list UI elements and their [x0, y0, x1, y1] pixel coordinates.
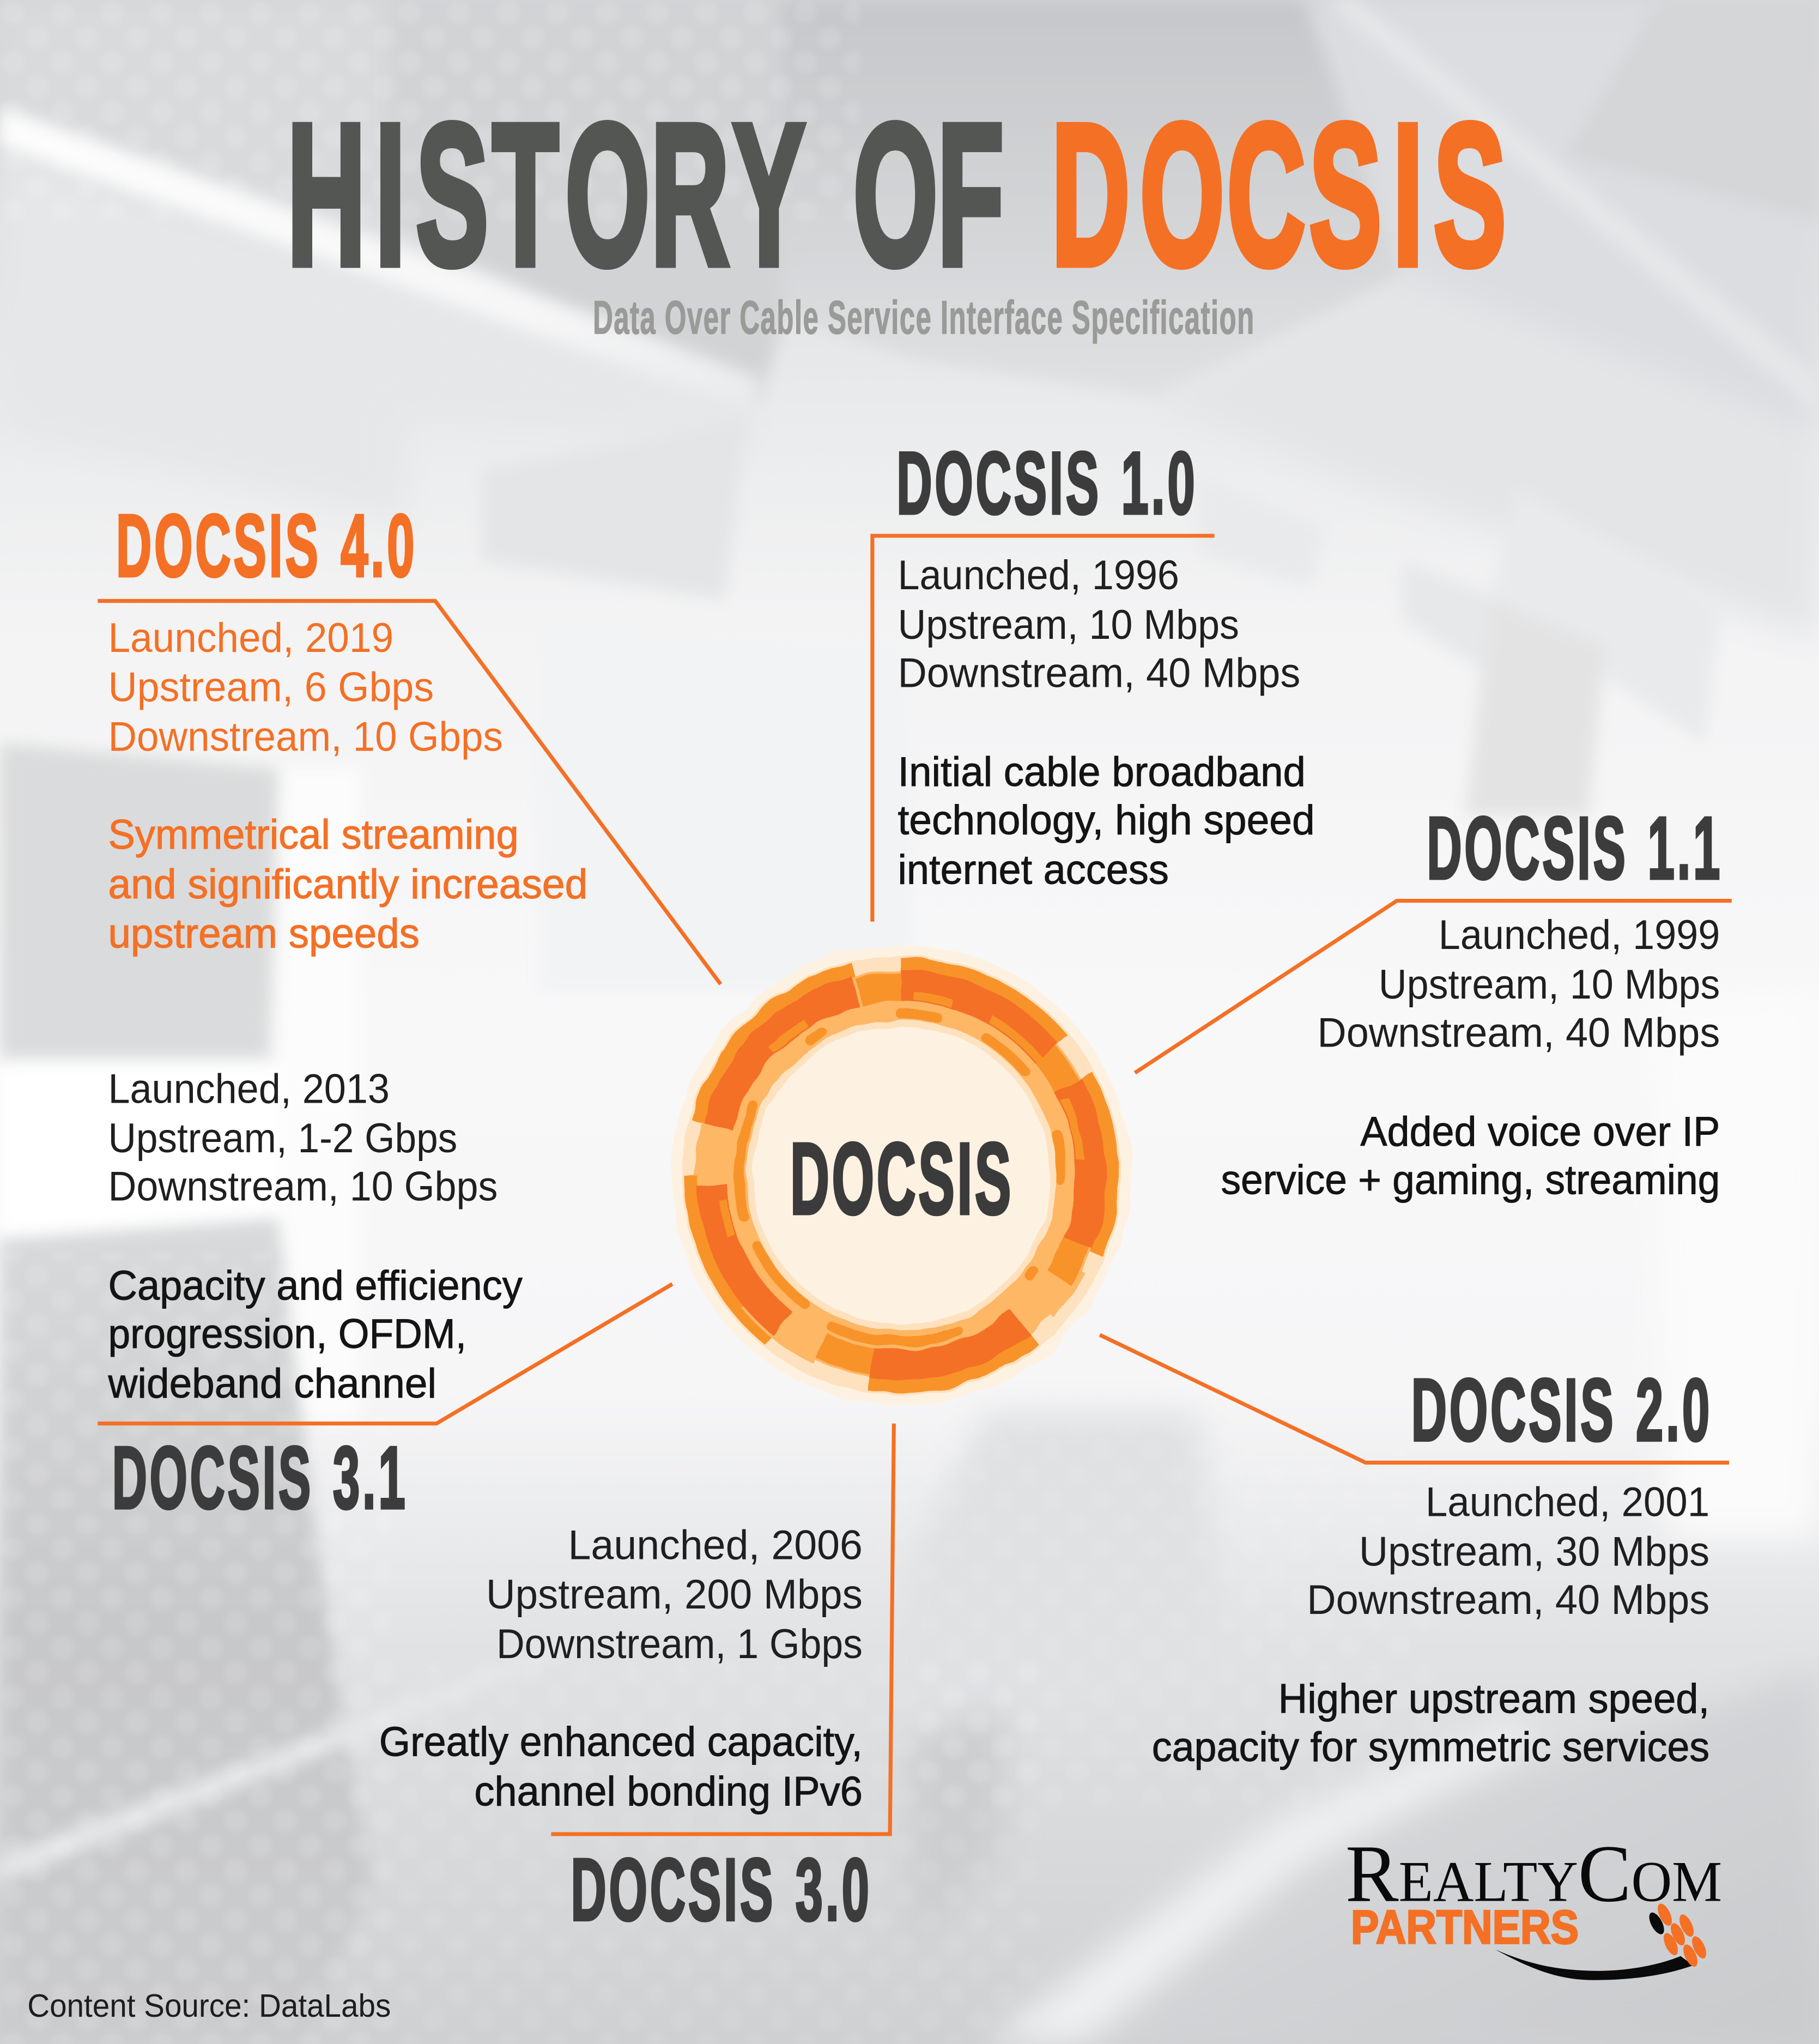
panel: DOCSIS 4.0 — [98, 497, 720, 984]
stats: Upstream, 6 Gbps — [108, 664, 434, 711]
ring peach layer — [682, 956, 1121, 1395]
connector line — [551, 1424, 894, 1834]
heading: DOCSIS 4.0 — [116, 497, 417, 595]
panel: DOCSIS 2.0 — [1100, 1335, 1729, 1770]
stats — [108, 615, 503, 760]
description: and significantly increased — [108, 861, 587, 908]
dark orange arcs — [635, 909, 1168, 1442]
stats: Downstream, 1 Gbps — [496, 1621, 863, 1667]
logo partners: PARTNERS — [1351, 1901, 1579, 1954]
description — [1221, 1109, 1720, 1204]
stats — [486, 1522, 863, 1667]
content source note: Content Source: DataLabs — [27, 1987, 391, 2024]
stats: Launched, 1996 — [898, 552, 1179, 598]
amber inner dashes — [673, 947, 1130, 1404]
description: upstream speeds — [108, 911, 420, 957]
outer amber arcs — [607, 880, 1197, 1471]
description — [108, 812, 587, 957]
connector line — [98, 1284, 672, 1424]
stats — [1307, 1479, 1709, 1623]
description: Initial cable broadband — [898, 749, 1306, 795]
description: progression, OFDM, — [108, 1311, 466, 1357]
description — [898, 749, 1315, 893]
description: Symmetrical streaming — [108, 812, 519, 858]
connector line — [98, 601, 720, 984]
stats: Launched, 2013 — [108, 1066, 390, 1112]
stats: Downstream, 10 Gbps — [108, 1164, 498, 1210]
stats: Upstream, 30 Mbps — [1359, 1528, 1709, 1575]
stats — [108, 1066, 498, 1210]
panel: DOCSIS 3.0 — [379, 1424, 894, 1939]
description: service + gaming, streaming — [1221, 1157, 1720, 1204]
title orange part: DOCSIS — [1052, 82, 1506, 307]
title dark part: HISTORY OF — [287, 82, 1004, 307]
ring artwork — [607, 880, 1197, 1471]
description: Greatly enhanced capacity, — [379, 1719, 863, 1765]
description: capacity for symmetric services — [1152, 1724, 1709, 1770]
logo: RealtyCom Partners — [1345, 1829, 1722, 1980]
stats: Launched, 2006 — [568, 1522, 863, 1568]
light orange middle band — [726, 1000, 1077, 1351]
description: Higher upstream speed, — [1278, 1676, 1709, 1722]
ring glow — [671, 945, 1131, 1406]
logo wordmark: REALTYCOM — [1345, 1829, 1722, 1919]
stats: Upstream, 10 Mbps — [898, 602, 1239, 648]
description: Capacity and efficiency — [108, 1262, 523, 1309]
stats — [898, 552, 1300, 696]
heading: DOCSIS 3.1 — [112, 1429, 408, 1527]
stats: Launched, 1999 — [1439, 912, 1720, 958]
stats: Upstream, 200 Mbps — [486, 1571, 863, 1618]
panel: DOCSIS 1.0 — [872, 434, 1315, 922]
subtitle: Data Over Cable Service Interface Specification — [593, 292, 1255, 344]
ring inner edge — [750, 1024, 1053, 1327]
description: wideband channel — [107, 1360, 436, 1407]
central ring emblem — [607, 880, 1197, 1471]
logo swoosh — [1495, 1950, 1693, 1980]
description — [1152, 1676, 1709, 1770]
title — [287, 82, 1506, 307]
description: technology, high speed — [898, 797, 1315, 844]
panel: DOCSIS 1.1 — [1135, 799, 1732, 1204]
description: Added voice over IP — [1360, 1109, 1720, 1155]
description: internet access — [898, 846, 1169, 893]
description — [107, 1262, 523, 1407]
stats: Downstream, 40 Mbps — [898, 650, 1300, 696]
amber accents on dark arcs — [647, 921, 1156, 1430]
connector line — [1135, 901, 1732, 1073]
stats: Launched, 2019 — [108, 615, 393, 661]
connector line — [1100, 1335, 1729, 1462]
centre label: DOCSIS — [790, 1122, 1014, 1235]
panel: DOCSIS 3.1 — [98, 1066, 672, 1527]
stats: Launched, 2001 — [1426, 1479, 1709, 1525]
stats: Downstream, 40 Mbps — [1317, 1009, 1720, 1056]
description: channel bonding IPv6 — [474, 1768, 863, 1815]
connector line — [872, 536, 1215, 922]
stats: Upstream, 1-2 Gbps — [108, 1115, 457, 1162]
stats — [1317, 912, 1720, 1056]
stats: Downstream, 40 Mbps — [1307, 1577, 1709, 1623]
stats: Downstream, 10 Gbps — [108, 714, 503, 760]
ring centre — [753, 1026, 1050, 1325]
amber mid patches — [636, 910, 1166, 1441]
heading: DOCSIS 3.0 — [571, 1841, 872, 1939]
heading: DOCSIS 1.0 — [896, 434, 1197, 533]
description — [379, 1719, 863, 1815]
stats: Upstream, 10 Mbps — [1379, 961, 1720, 1008]
logo flower icon — [1646, 1902, 1709, 1969]
light orange outer patches — [642, 916, 1161, 1435]
